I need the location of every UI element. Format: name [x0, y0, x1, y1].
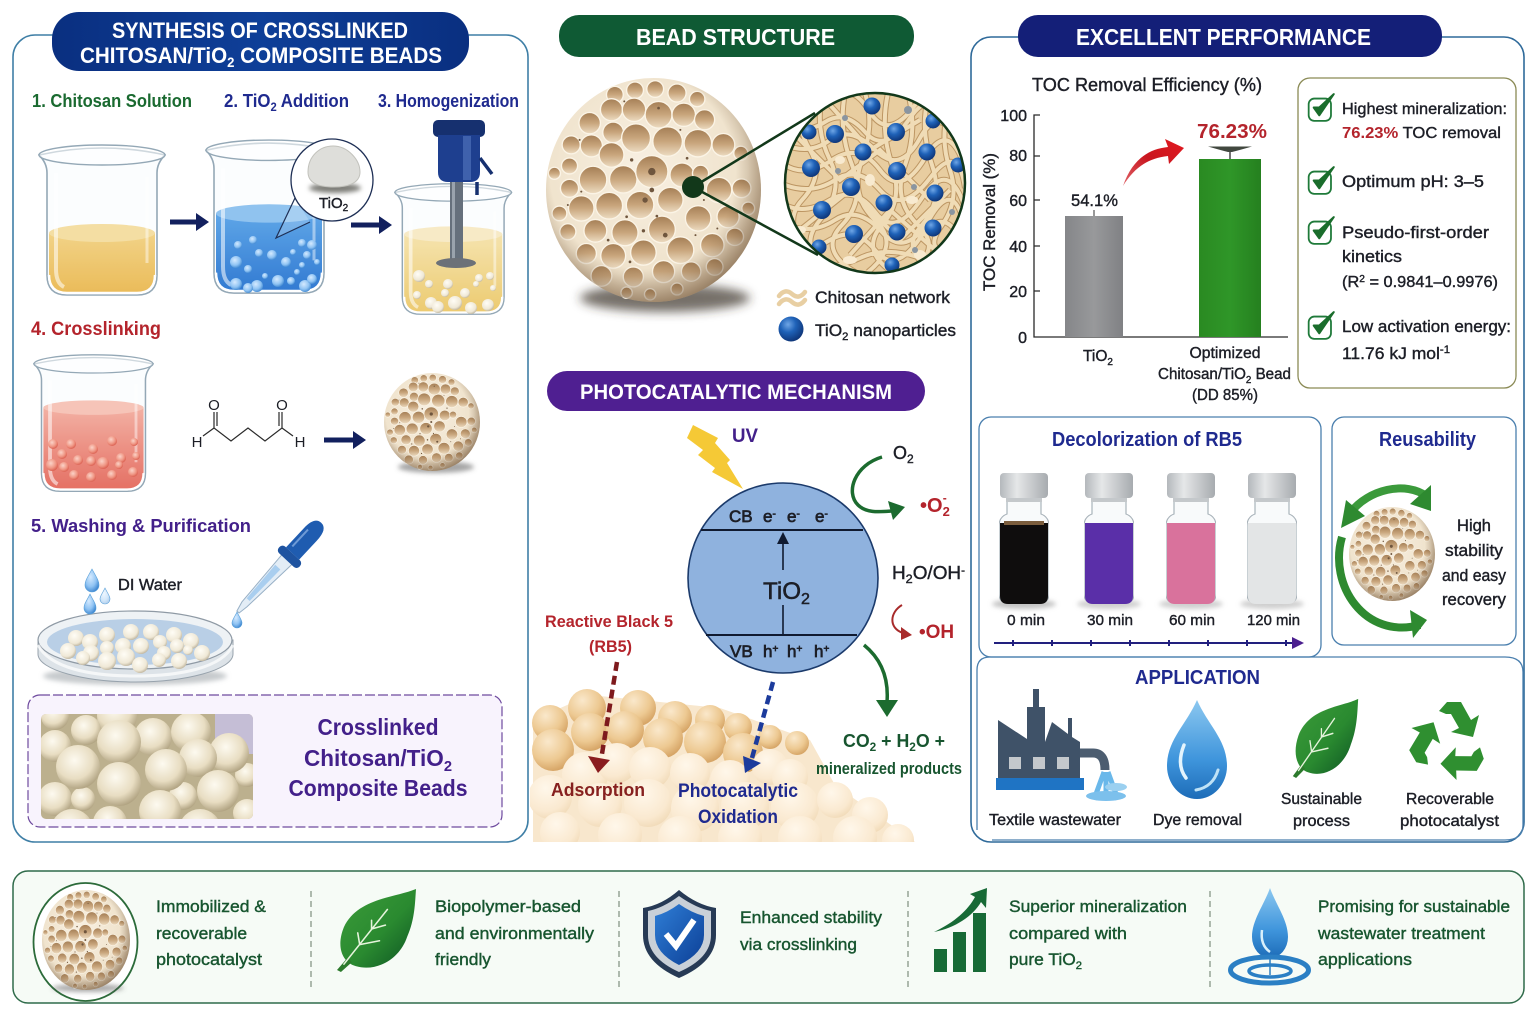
- bar chart: TOC removal efficiency: TiO: [1083, 348, 1107, 365]
- diagram: TiO2 band structure: +: [796, 644, 802, 655]
- item: activation energy: [1309, 312, 1511, 363]
- benefit: recoverable: photocatalyst: [156, 950, 262, 969]
- benefit: mineralization: 2: [1076, 960, 1082, 972]
- vial: 30 min: 30 min: [1087, 612, 1133, 629]
- icon: reuse cycle arrows: [1339, 485, 1431, 638]
- label: sustainable process: [1281, 791, 1362, 830]
- molecule: glutaraldehyde: H: [295, 434, 305, 451]
- item: optimum pH: [1309, 167, 1484, 194]
- item: highest mineralization: 76.23% TOC removal: [1342, 125, 1501, 142]
- vial: 0 min: 0 min: [1007, 612, 1045, 629]
- heading: synthesis title: 2: [227, 54, 235, 70]
- diagram: TiO2 band structure: +: [772, 644, 778, 655]
- heading: bead structure: [559, 15, 914, 57]
- panel: reusability: [1332, 417, 1516, 645]
- diagram: TiO2 band structure: VB: [730, 642, 753, 661]
- legend: TiO2 nanoparticles: nanoparticles: [848, 321, 956, 340]
- icon: pipette: [228, 513, 331, 622]
- diagram: TiO2 band structure: e: [815, 507, 824, 526]
- diagram: TiO2 band structure: -: [824, 509, 828, 520]
- arrow: photocatalytic oxidation: [743, 682, 773, 773]
- heading: synthesis title: CHITOSAN/TiO: [80, 43, 237, 68]
- label: water hydroxide: O/OH: [913, 563, 961, 583]
- label: composite beads: Composite Beads: [288, 775, 468, 801]
- label: mineralization products: + H: [876, 731, 909, 751]
- panel: photocatalytic mechanism: [528, 371, 965, 860]
- benefit: mineralization: compared with: [1009, 924, 1127, 943]
- step 5: washing and purification: [31, 513, 331, 685]
- heading: photocatalytic mechanism: PHOTOCATALYTIC MECHANISM: [580, 381, 892, 404]
- label: stability text: stability: [1445, 542, 1504, 560]
- legend: chitosan network: Chitosan network: [815, 288, 951, 307]
- diagram: TiO2 band structure: e: [787, 507, 796, 526]
- benefit: wastewater treatment: applications: [1318, 950, 1412, 969]
- molecule: glutaraldehyde: H: [192, 434, 202, 451]
- icon: UV lightning bolt: [687, 425, 743, 489]
- icon: factory: [996, 689, 1127, 801]
- bar: TiO2: 54.1%: [1071, 191, 1118, 210]
- bar chart: TOC removal efficiency: 2: [1107, 357, 1113, 368]
- icon: water drops: [84, 569, 242, 628]
- item: kinetics: [1309, 217, 1498, 291]
- icon: mixer: [433, 120, 492, 268]
- bar: optimized bead: 76.23%: [1197, 121, 1267, 143]
- legend: TiO2 nanoparticles: [778, 316, 956, 343]
- bar chart: TOC removal efficiency: Bead: [1251, 366, 1291, 383]
- zoom inset: bead microstructure: [682, 78, 966, 273]
- bar chart: TOC removal efficiency: 2: [1246, 375, 1252, 386]
- step 4: crosslinking: [31, 319, 480, 491]
- item: activation energy: Low activation energy:: [1342, 318, 1511, 336]
- molecule: glutaraldehyde: O: [276, 397, 288, 414]
- label: Reactive Black 5: (RB5): [589, 637, 632, 656]
- label: mineralization products: 2: [909, 740, 916, 754]
- diagram: TiO2 band structure: e: [763, 507, 772, 526]
- label: mineralization products: CO: [843, 731, 870, 751]
- label: adsorption: Adsorption: [551, 780, 645, 800]
- diagram: TiO2 band structure: -: [772, 509, 776, 520]
- step 2: TiO2 addition: [206, 91, 373, 293]
- diagram: TiO2 band structure: [688, 483, 878, 673]
- label: sustainable process: Sustainable: [1281, 791, 1362, 808]
- icon: petri dish: [38, 611, 233, 685]
- vial: 0 min: [992, 473, 1056, 629]
- step 1: chitosan solution: 1. Chitosan Solution: [32, 91, 192, 111]
- benefit: mineralization: pure TiO: [1009, 950, 1074, 969]
- benefit: wastewater treatment: Promising for sustainable: [1318, 897, 1510, 916]
- callout: TiO2 powder: [276, 139, 373, 238]
- heading: bead structure: BEAD STRUCTURE: [636, 24, 835, 50]
- benefit: stability: [643, 890, 883, 978]
- panel: application: APPLICATION: [1135, 667, 1260, 689]
- label: stability text: recovery: [1442, 591, 1507, 609]
- label: O2: 2: [907, 452, 914, 466]
- benefit: biopolymer: [337, 889, 595, 972]
- panel: key results checklist: [1298, 78, 1516, 388]
- benefit: biopolymer: and environmentally: [435, 924, 595, 943]
- vial: 30 min: [1077, 473, 1141, 629]
- icon: crosslinked bead: [384, 373, 480, 473]
- image: pile of beads: [41, 714, 253, 819]
- benefit: biopolymer: Biopolymer-based: [435, 897, 581, 916]
- label: stability text: High: [1457, 517, 1491, 535]
- item: optimum pH: Optimum pH: 3–5: [1342, 172, 1484, 191]
- label: water hydroxide: 2: [906, 572, 913, 586]
- arrow: crosslinker to bead: [324, 431, 366, 449]
- callout: TiO2 powder: TiO: [319, 195, 343, 212]
- bar chart: TOC removal efficiency: Optimized: [1190, 345, 1260, 362]
- label: photocatalytic oxidation: [678, 781, 798, 828]
- panel: application: Dye removal: [1153, 812, 1242, 829]
- benefit: stability: Enhanced stability: [740, 908, 883, 927]
- label: mineralization products: 2: [870, 740, 877, 754]
- step 1: chitosan solution: [32, 91, 192, 295]
- icon: dye drop: [1167, 700, 1227, 799]
- arrow: RB5 adsorption: [588, 662, 617, 773]
- benefit: recoverable: recoverable: [156, 924, 247, 943]
- bar chart: TOC removal efficiency: 20: [1009, 284, 1027, 301]
- label: hydroxyl radical: •OH: [919, 622, 954, 643]
- label: composite beads: [288, 714, 468, 801]
- step 2: TiO2 addition: 2: [270, 100, 277, 114]
- vial: 120 min: 120 min: [1247, 612, 1300, 629]
- icon: growth chart: [934, 888, 987, 972]
- bar chart: TOC removal efficiency: Chitosan/TiO: [1158, 366, 1248, 383]
- label: photocatalytic oxidation: Oxidation: [698, 807, 778, 828]
- diagram: TiO2 band structure: CB: [729, 507, 753, 526]
- panel: application: [977, 657, 1523, 840]
- panel: key benefits strip: [13, 871, 1524, 1003]
- arrow: time axis: [994, 637, 1304, 649]
- heading: excellent performance: EXCELLENT PERFORMANCE: [1076, 24, 1371, 50]
- heading: photocatalytic mechanism: [547, 371, 925, 411]
- molecule: glutaraldehyde: [192, 397, 305, 451]
- benefit: wastewater treatment: [1230, 888, 1510, 983]
- arrow: improvement: [1123, 139, 1184, 186]
- panel: bead structure: [546, 15, 966, 343]
- step 2: TiO2 addition: Addition: [277, 91, 349, 111]
- bar chart: TOC removal efficiency: 0: [1018, 330, 1027, 347]
- bar chart: TOC removal efficiency: (DD 85%): [1192, 387, 1258, 404]
- label: superoxide radical: -: [943, 491, 947, 505]
- item: kinetics: (R: [1342, 274, 1359, 291]
- label: composite beads: Chitosan/TiO: [304, 745, 447, 771]
- benefit: stability: via crosslinking: [740, 935, 857, 954]
- label: composite beads: 2: [444, 758, 452, 775]
- legend: TiO2 nanoparticles: TiO: [815, 321, 842, 340]
- bar: TiO2: [1065, 191, 1123, 337]
- heading: synthesis title: COMPOSITE BEADS: [234, 43, 442, 68]
- item: activation energy: -1: [1440, 344, 1450, 356]
- diagram: TiO2 band structure: 2: [801, 591, 810, 608]
- panel: reusability: Reusability: [1379, 429, 1477, 451]
- benefit: recoverable: Immobilized &: [156, 897, 267, 916]
- panel: decolorization of RB5: [979, 417, 1321, 657]
- label: recoverable photocatalyst: Recoverable: [1406, 791, 1494, 808]
- vial: 60 min: [1159, 473, 1223, 629]
- step 3: homogenization: 3. Homogenization: [378, 91, 519, 111]
- item: activation energy: 11.76 kJ mol: [1342, 344, 1437, 363]
- arrow: water to hydroxyl radical: [892, 605, 912, 640]
- label: mineralization products: mineralized products: [816, 760, 962, 778]
- benefit: wastewater treatment: wastewater treatment: [1317, 924, 1485, 943]
- heading: excellent performance: [1018, 15, 1442, 57]
- heading: synthesis title: [52, 12, 469, 71]
- bar chart: TOC removal efficiency: 40: [1009, 239, 1027, 256]
- label: Reactive Black 5: Reactive Black 5: [545, 612, 673, 631]
- beads: catalyst bed: [530, 689, 915, 842]
- arrow: O2 to superoxide: [852, 457, 905, 520]
- label: Reactive Black 5: [545, 612, 673, 656]
- label: photocatalytic oxidation: Photocatalytic: [678, 781, 798, 802]
- bar: optimized bead: [1197, 121, 1267, 337]
- bar chart: TOC removal efficiency: TOC Removal Efficiency (%): [1032, 75, 1262, 95]
- legend: TiO2 nanoparticles: 2: [842, 331, 848, 343]
- panel: decolorization of RB5: Decolorization of RB5: [1052, 429, 1242, 451]
- bar chart: TOC removal efficiency: 80: [1009, 148, 1027, 165]
- label: composite beads: Crosslinked: [318, 714, 438, 740]
- vial: 60 min: 60 min: [1169, 612, 1215, 629]
- benefit: mineralization: Superior mineralization: [1009, 897, 1187, 916]
- label: mineralization products: O +: [916, 731, 945, 751]
- diagram: TiO2 band structure: h: [763, 642, 772, 661]
- item: kinetics: = 0.9841–0.9976): [1365, 274, 1498, 291]
- step 4: crosslinking: 4. Crosslinking: [31, 319, 161, 340]
- benefit: mineralization: [934, 888, 1187, 972]
- arrow: mineralization: [864, 645, 898, 717]
- item: highest mineralization: Highest mineralization:: [1342, 101, 1507, 118]
- step 2: TiO2 addition: 2. TiO: [224, 91, 274, 111]
- item: kinetics: 2: [1359, 274, 1365, 285]
- label: stability text: and easy: [1442, 567, 1507, 585]
- bar chart: TOC removal efficiency: TOC Removal (%): [980, 153, 999, 291]
- bar chart: TOC removal efficiency: 60: [1009, 193, 1027, 210]
- item: kinetics: Pseudo-first-order: [1342, 223, 1489, 242]
- label: stability text: [1442, 517, 1507, 609]
- label: mineralization products: [816, 731, 962, 778]
- heading: synthesis title: SYNTHESIS OF CROSSLINKED: [112, 18, 408, 43]
- label: recoverable photocatalyst: [1400, 791, 1500, 830]
- label: water hydroxide: -: [961, 565, 965, 577]
- arrow: step 2 to 3: [351, 216, 392, 234]
- step 5: washing and purification: 5. Washing & Purification: [31, 516, 251, 536]
- molecule: glutaraldehyde: O: [208, 397, 220, 414]
- icon: drop with ripple: [1230, 888, 1308, 983]
- label: sustainable process: process: [1293, 813, 1350, 830]
- vial: 120 min: [1240, 473, 1304, 629]
- label: superoxide radical: •O: [920, 495, 943, 517]
- label: DI water: DI Water: [118, 577, 183, 594]
- diagram: TiO2 band structure: +: [823, 644, 829, 655]
- callout: composite beads result: [27, 694, 503, 828]
- icon: recycled bead: [1349, 507, 1435, 601]
- label: water hydroxide: H: [892, 563, 905, 583]
- label: superoxide radical: 2: [943, 504, 950, 519]
- diagram: TiO2 band structure: h: [787, 642, 796, 661]
- bead: large porous bead: [546, 78, 761, 312]
- label: UV: UV: [732, 426, 758, 447]
- icon: green leaf: [1293, 699, 1358, 778]
- bar chart: TOC removal efficiency: [980, 75, 1291, 404]
- label: recoverable photocatalyst: photocatalyst: [1400, 813, 1500, 830]
- panel: application: Textile wastewater: [989, 812, 1122, 829]
- benefit: biopolymer: friendly: [435, 950, 491, 969]
- diagram: TiO2 band structure: h: [814, 642, 823, 661]
- icon: recycling: [1400, 702, 1488, 786]
- callout: TiO2 powder: 2: [343, 203, 349, 214]
- arrow: step 1 to 2: [170, 213, 209, 231]
- icon: shield: [643, 890, 716, 978]
- diagram: TiO2 band structure: -: [796, 509, 800, 520]
- item: highest mineralization: [1309, 94, 1507, 142]
- panel: excellent performance: [971, 15, 1524, 842]
- step 3: homogenization: [378, 91, 519, 314]
- bar chart: TOC removal efficiency: 100: [1000, 108, 1027, 125]
- diagram: TiO2 band structure: TiO: [763, 578, 801, 605]
- item: kinetics: kinetics: [1342, 247, 1402, 266]
- benefit: recoverable: [34, 883, 267, 1001]
- label: O2: O: [893, 443, 907, 463]
